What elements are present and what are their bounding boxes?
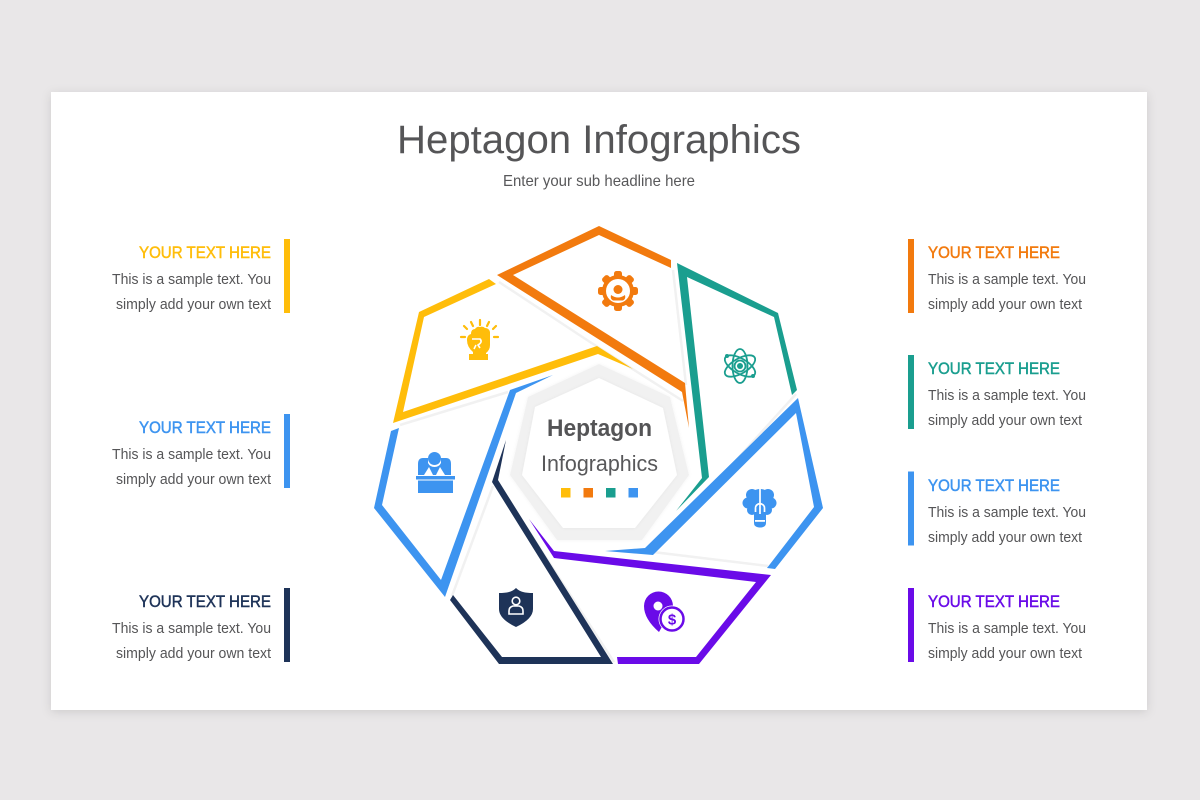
callout: right blue [908,472,1086,546]
center subheading: Infographics [541,451,658,476]
callout: orange: This is a sample text. You [928,272,1086,288]
callout: yellow: simply add your own text [116,297,271,313]
icon: gear with person [598,271,638,311]
callout: navy: This is a sample text. You [112,621,271,637]
white card panel [51,92,1147,710]
heptagon diagram [374,226,823,664]
callout: yellow [112,239,290,313]
callout: right blue: This is a sample text. You [928,505,1086,521]
callout: yellow: This is a sample text. You [112,272,271,288]
callout: purple: simply add your own text [928,646,1082,662]
callout: left blue: This is a sample text. You [112,447,271,463]
callout: teal: YOUR TEXT HERE [928,359,1060,378]
center heading: Heptagon [547,415,652,442]
callout: purple [908,588,1086,662]
title: Heptagon Infographics [397,118,801,162]
icon: location pin with dollar [644,592,686,632]
callout: right blue: YOUR TEXT HERE [928,476,1060,495]
icon: shield with person [499,588,533,627]
segment: right blue [605,398,823,569]
segment: yellow [393,279,633,423]
callout: navy: YOUR TEXT HERE [139,592,271,611]
callout: orange [908,239,1086,313]
callout: left blue: YOUR TEXT HERE [139,418,271,437]
callout: left blue: simply add your own text [116,472,271,488]
callout: teal [908,355,1086,429]
callout: navy [112,588,290,662]
callout: navy: simply add your own text [116,646,271,662]
subtitle: Enter your sub headline here [503,173,695,190]
segment: navy [450,440,613,664]
icon: location pin with dollar: $ [668,612,677,628]
center colour squares [561,488,638,498]
callout: right blue: simply add your own text [928,530,1082,546]
callout: orange: simply add your own text [928,297,1082,313]
callout: purple: This is a sample text. You [928,621,1086,637]
callout: purple: YOUR TEXT HERE [928,592,1060,611]
segment: teal [676,263,797,511]
callout: yellow: YOUR TEXT HERE [139,243,271,262]
segment: orange [497,226,689,428]
center heptagon ring [510,364,689,540]
icon: speaker at podium [416,452,455,493]
callout: left blue [112,414,290,488]
icon: brain with arrow [742,489,776,528]
callout: teal: simply add your own text [928,413,1082,429]
center heptagon face [522,378,677,528]
callout: orange: YOUR TEXT HERE [928,243,1060,262]
icon: fist with rays [461,320,498,360]
segment: purple [529,519,771,664]
segment: left blue [374,375,553,597]
callout: teal: This is a sample text. You [928,388,1086,404]
icon: atom [722,349,758,383]
